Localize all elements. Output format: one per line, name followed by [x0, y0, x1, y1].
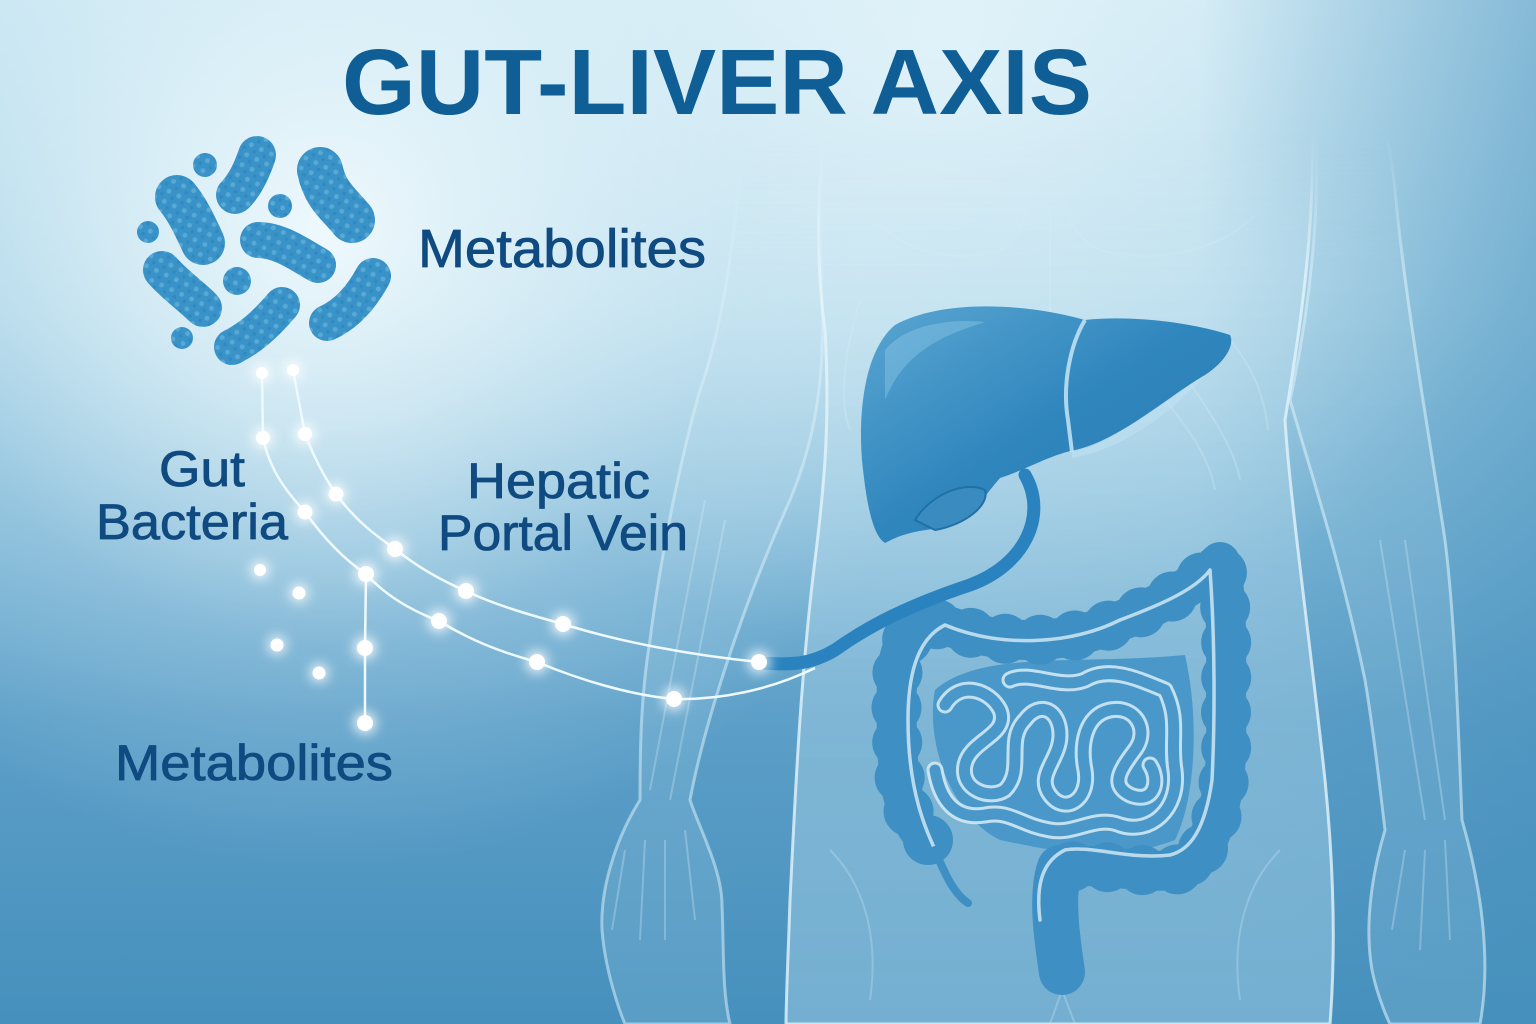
- glowing nodes: [251, 361, 770, 734]
- label: metabolites top: Metabolites: [418, 219, 706, 279]
- left arm: [600, 277, 824, 1024]
- small intestine: [933, 655, 1194, 854]
- colon: [896, 562, 1226, 972]
- label: gut bacteria: Bacteria: [96, 494, 288, 550]
- bacteria cluster: [137, 153, 373, 349]
- right arm: [1290, 70, 1485, 1024]
- gallbladder: [915, 487, 986, 530]
- pathway lines: [262, 370, 815, 723]
- appendix: [935, 850, 968, 903]
- ribcage and chest lines: [830, 341, 1280, 1022]
- label: metabolites bottom: Metabolites: [115, 735, 393, 791]
- label: hepatic portal vein: Portal Vein: [438, 505, 688, 561]
- arm bones: [612, 500, 1450, 950]
- label: gut bacteria: Gut: [159, 441, 245, 497]
- bacterium beans: [162, 155, 373, 347]
- liver: [861, 306, 1231, 543]
- liver lobe divide: [1066, 320, 1085, 452]
- liver highlight: [885, 321, 985, 400]
- human body silhouette: [602, 70, 1485, 1024]
- portal vein tube: [760, 475, 1034, 664]
- colon inner light line: [908, 570, 1214, 920]
- rectum: [1055, 868, 1062, 972]
- title: GUT-LIVER AXIS: [342, 30, 1092, 134]
- label: hepatic portal vein: Hepatic: [467, 453, 650, 509]
- torso: [786, 130, 1333, 1024]
